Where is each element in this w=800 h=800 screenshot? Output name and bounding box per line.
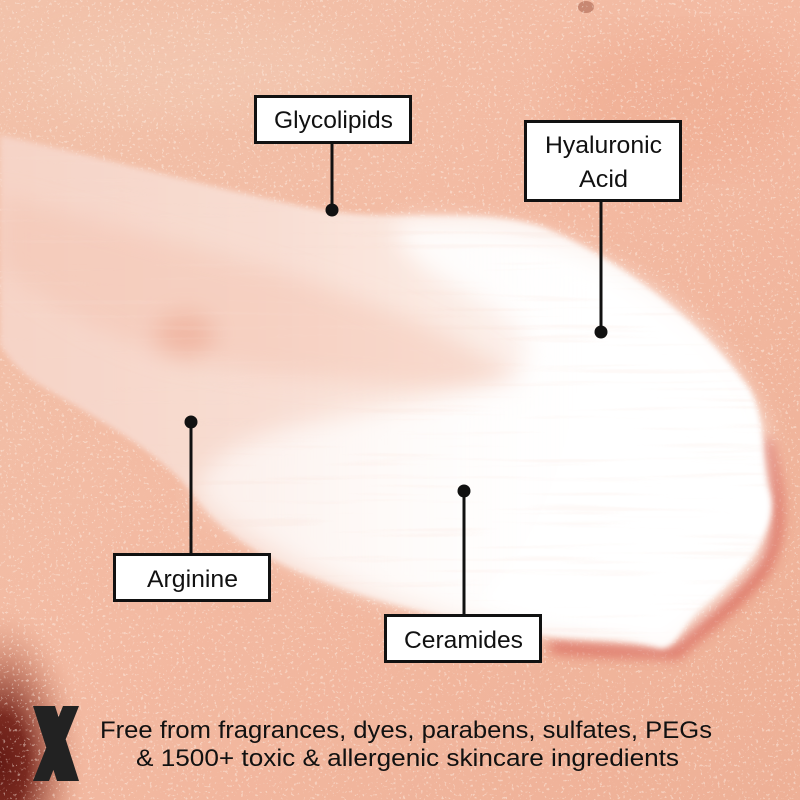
red shadow around cream bbox=[555, 445, 777, 652]
brush texture bbox=[0, 130, 800, 650]
leader: Glycolipids bbox=[256, 96, 410, 216]
leader: Hyaluronic Acid: Hyaluronic bbox=[545, 132, 662, 159]
pink band through cream bbox=[7, 208, 510, 391]
white body of cream bbox=[198, 222, 766, 644]
leader: Hyaluronic Acid: Acid bbox=[579, 166, 628, 193]
leader: Arginine: Arginine bbox=[147, 566, 238, 593]
footer text: Free from fragrances, dyes, parabens, sulfates, PEGs bbox=[100, 717, 712, 744]
footer text bbox=[100, 717, 712, 772]
leader: Ceramides: Ceramides bbox=[404, 627, 523, 654]
cream swatch bbox=[0, 130, 800, 650]
logo: X mark bbox=[33, 706, 79, 781]
leader: Glycolipids: Glycolipids bbox=[274, 107, 393, 134]
leader: Hyaluronic Acid bbox=[526, 122, 680, 338]
leader: Ceramides bbox=[386, 484, 540, 662]
solid white core bbox=[480, 285, 754, 630]
leader: Arginine bbox=[114, 416, 270, 600]
footer text: & 1500+ toxic & allergenic skincare ingredients bbox=[136, 745, 679, 772]
